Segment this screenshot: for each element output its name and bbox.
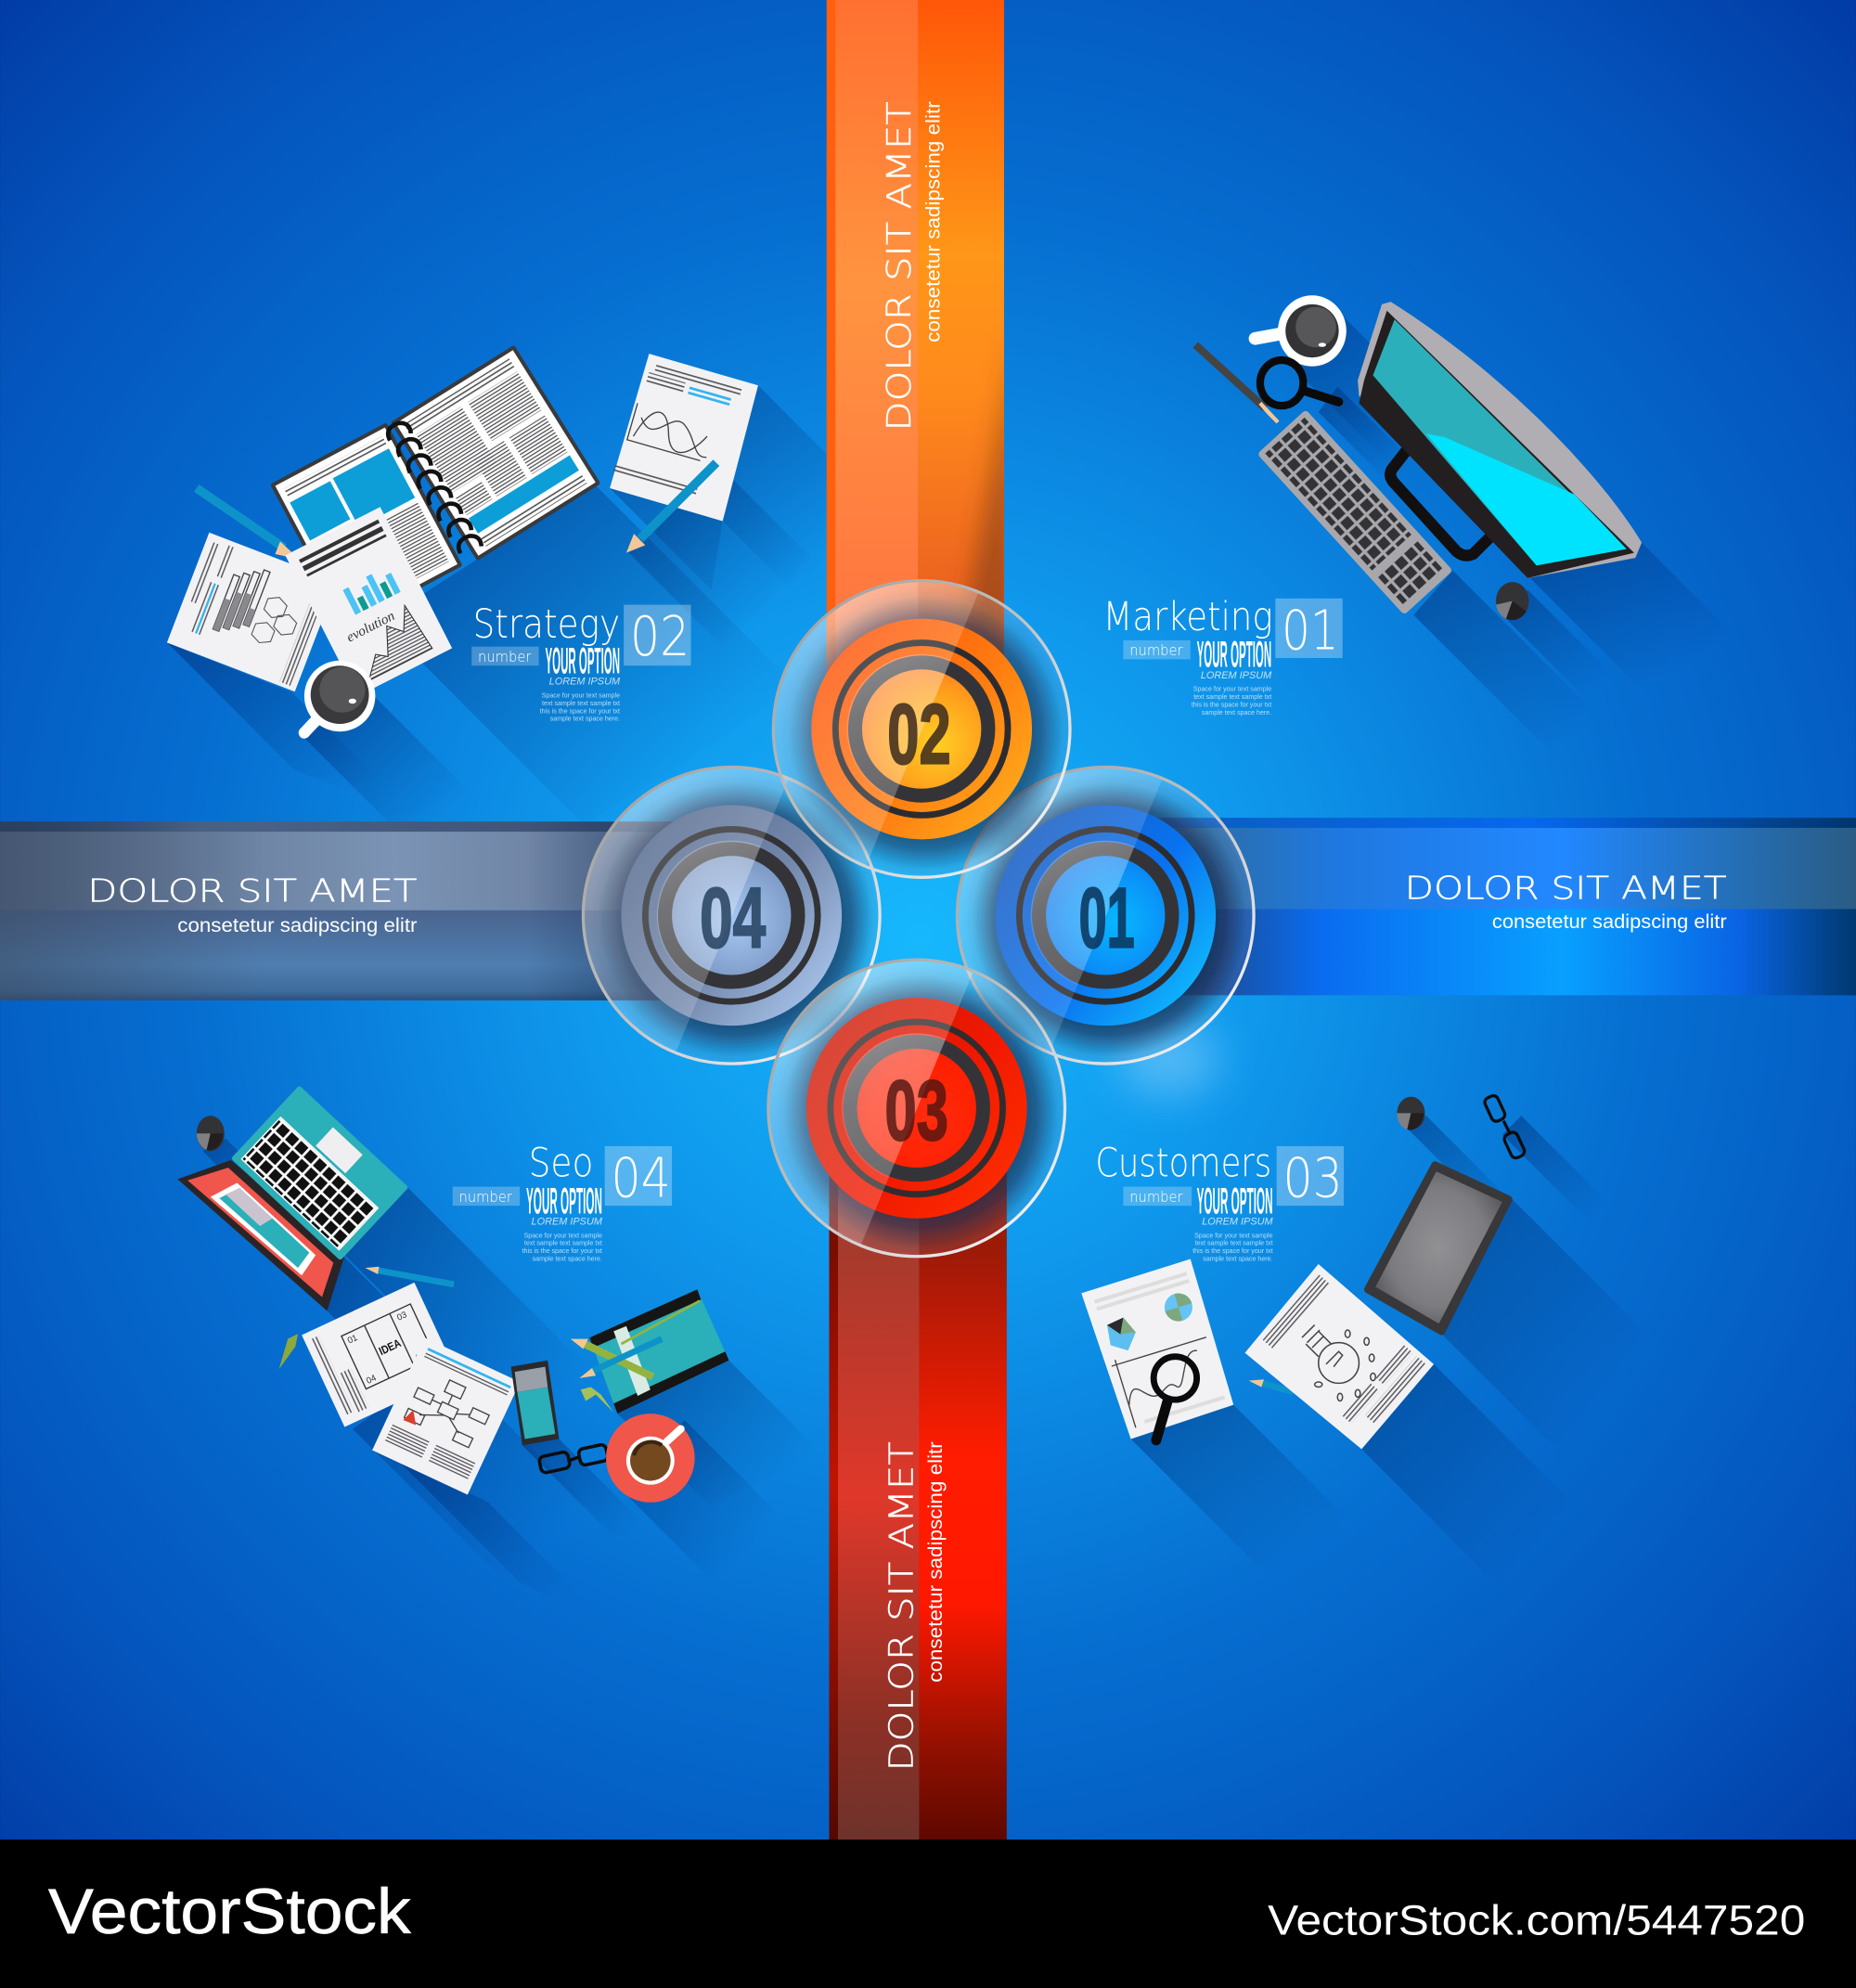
brand name: VectorStock (48, 1877, 412, 1947)
body text: this is the space for your txt (1192, 1247, 1273, 1255)
illustration: strategy desk (167, 345, 758, 733)
illustration: marketing desk (1195, 295, 1642, 620)
pin green (279, 1334, 298, 1369)
body text: text sample text sample txt (1193, 693, 1271, 701)
number box (1275, 599, 1343, 658)
glasses (538, 1444, 609, 1474)
tag text: number (478, 648, 532, 665)
mouse (1496, 582, 1529, 620)
label block: customers (1095, 1141, 1344, 1263)
evolution chart sheet (285, 507, 452, 696)
strip heading: DOLOR SIT AMET (881, 101, 919, 431)
body text: text sample text sample txt (524, 1240, 602, 1247)
illustration: seo desk (177, 1085, 729, 1503)
tag text: number (1129, 641, 1183, 659)
strip heading: DOLOR SIT AMET (1405, 871, 1727, 908)
body text: sample text space here. (533, 1256, 602, 1263)
sketched bars (213, 561, 270, 640)
body text: Space for your text sample (524, 1232, 602, 1239)
title: Strategy (473, 601, 620, 647)
pin green (581, 1387, 613, 1413)
disc 04 (581, 765, 882, 1065)
soft glow under discs (1118, 1021, 1219, 1097)
lightbulb (1302, 1325, 1375, 1401)
tag (1123, 1187, 1192, 1206)
strip: left grey (0, 821, 731, 1000)
blue pencil (626, 463, 716, 553)
body text: this is the space for your txt (522, 1247, 602, 1255)
label block: seo (453, 1141, 672, 1263)
body text: sample text space here. (1203, 1256, 1273, 1263)
chart sheet with bars and cubes (167, 533, 337, 691)
mouse (197, 1116, 225, 1151)
red cup (606, 1414, 695, 1503)
title: Customers (1095, 1141, 1271, 1186)
smartphone (511, 1361, 559, 1445)
disc number: 02 (887, 687, 951, 781)
body text: Space for your text sample (1193, 686, 1271, 693)
disc 02 (772, 579, 1072, 879)
long shadows (167, 317, 1746, 1629)
caption: LOREM IPSUM (1201, 670, 1272, 681)
coffee mug (304, 661, 375, 733)
label block: seo: YOUR OPTION (526, 1181, 602, 1221)
caption: LOREM IPSUM (1202, 1217, 1273, 1228)
pencil (1195, 345, 1278, 422)
handwritten label: evolution (344, 609, 397, 645)
strip subheading: consetetur sadipscing elitr (922, 101, 944, 342)
number: 02 (630, 604, 690, 668)
green pencil (571, 1339, 653, 1377)
strip: top orange (826, 0, 1004, 674)
glasses (1483, 1094, 1526, 1159)
caption: LOREM IPSUM (532, 1217, 603, 1228)
polygon chart (1104, 1315, 1141, 1355)
strip: right blue (1105, 818, 1856, 995)
idea numerals: 02 (414, 1350, 428, 1363)
flowchart sheet (372, 1337, 520, 1494)
caption: LOREM IPSUM (549, 677, 621, 688)
idea word: IDEA (377, 1336, 403, 1358)
pencil (197, 488, 299, 559)
body text: Space for your text sample (1194, 1232, 1273, 1239)
idea numerals: 04 (365, 1373, 379, 1387)
tag (471, 647, 539, 665)
tablet (1368, 1165, 1509, 1331)
document with curves (610, 354, 758, 521)
body text: this is the space for your txt (1192, 701, 1271, 708)
footer bar (0, 1840, 1856, 1988)
body text: sample text space here. (550, 716, 620, 723)
analysis sheet (1081, 1259, 1233, 1439)
number box (605, 1146, 672, 1206)
keyboard (1257, 409, 1453, 615)
label block: marketing: YOUR OPTION (1197, 635, 1271, 676)
strip subheading: consetetur sadipscing elitr (177, 915, 417, 936)
area chart (346, 603, 432, 680)
label block: marketing (1103, 594, 1343, 716)
notebook left page (270, 422, 463, 627)
number box (624, 605, 691, 665)
tag (453, 1187, 520, 1206)
illustration: customers desk (1081, 1094, 1526, 1449)
number: 01 (1282, 598, 1339, 662)
sketched cubes (250, 593, 303, 652)
title: Marketing (1103, 594, 1273, 639)
label block: customers: YOUR OPTION (1197, 1181, 1273, 1221)
body text: sample text space here. (1202, 709, 1271, 716)
strip heading: DOLOR SIT AMET (87, 872, 418, 910)
notebook right page (382, 345, 600, 566)
label block: strategy: YOUR OPTION (545, 640, 620, 681)
spiral binding (384, 419, 483, 558)
tag text: number (1129, 1188, 1183, 1206)
magnifier (1260, 360, 1339, 406)
mini bar chart (342, 566, 401, 615)
disc 01 (956, 765, 1256, 1065)
label block: strategy (471, 601, 691, 723)
body text: text sample text sample txt (542, 700, 620, 707)
pencil (1249, 1379, 1293, 1392)
body text: text sample text sample txt (1195, 1240, 1273, 1247)
disc number: 04 (700, 871, 766, 965)
magnifier (1154, 1357, 1197, 1440)
number: 04 (611, 1146, 671, 1210)
number box (1277, 1146, 1344, 1206)
teal notebook (589, 1289, 729, 1414)
pencil (365, 1267, 454, 1284)
laptop base (231, 1085, 408, 1260)
body text: this is the space for your txt (540, 707, 620, 715)
monitor (1358, 302, 1642, 578)
disc number: 03 (885, 1064, 948, 1158)
pie chart (1161, 1290, 1196, 1324)
coffee mug (1255, 295, 1347, 367)
strip subheading: consetetur sadipscing elitr (1492, 911, 1727, 933)
disc 03 (767, 958, 1067, 1259)
strip: bottom red (829, 1108, 1007, 1840)
monitor stand (1390, 446, 1501, 556)
disc number: 01 (1079, 871, 1135, 965)
idea numerals: 01 (346, 1333, 359, 1347)
blue pencil (579, 1339, 662, 1378)
tag (1123, 640, 1191, 659)
idea numerals: 03 (395, 1310, 408, 1323)
number: 03 (1282, 1146, 1343, 1210)
idea sheet (302, 1283, 458, 1427)
mouse (1397, 1097, 1425, 1130)
tag text: number (459, 1188, 512, 1206)
body text: Space for your text sample (542, 691, 620, 699)
pin red (403, 1410, 416, 1425)
laptop screen (177, 1160, 345, 1311)
strip heading: DOLOR SIT AMET (883, 1441, 922, 1771)
lightbulb sheet (1245, 1264, 1434, 1449)
title: Seo (529, 1141, 593, 1186)
strip subheading: consetetur sadipscing elitr (925, 1441, 947, 1683)
stock id: VectorStock.com/5447520 (1268, 1897, 1805, 1944)
